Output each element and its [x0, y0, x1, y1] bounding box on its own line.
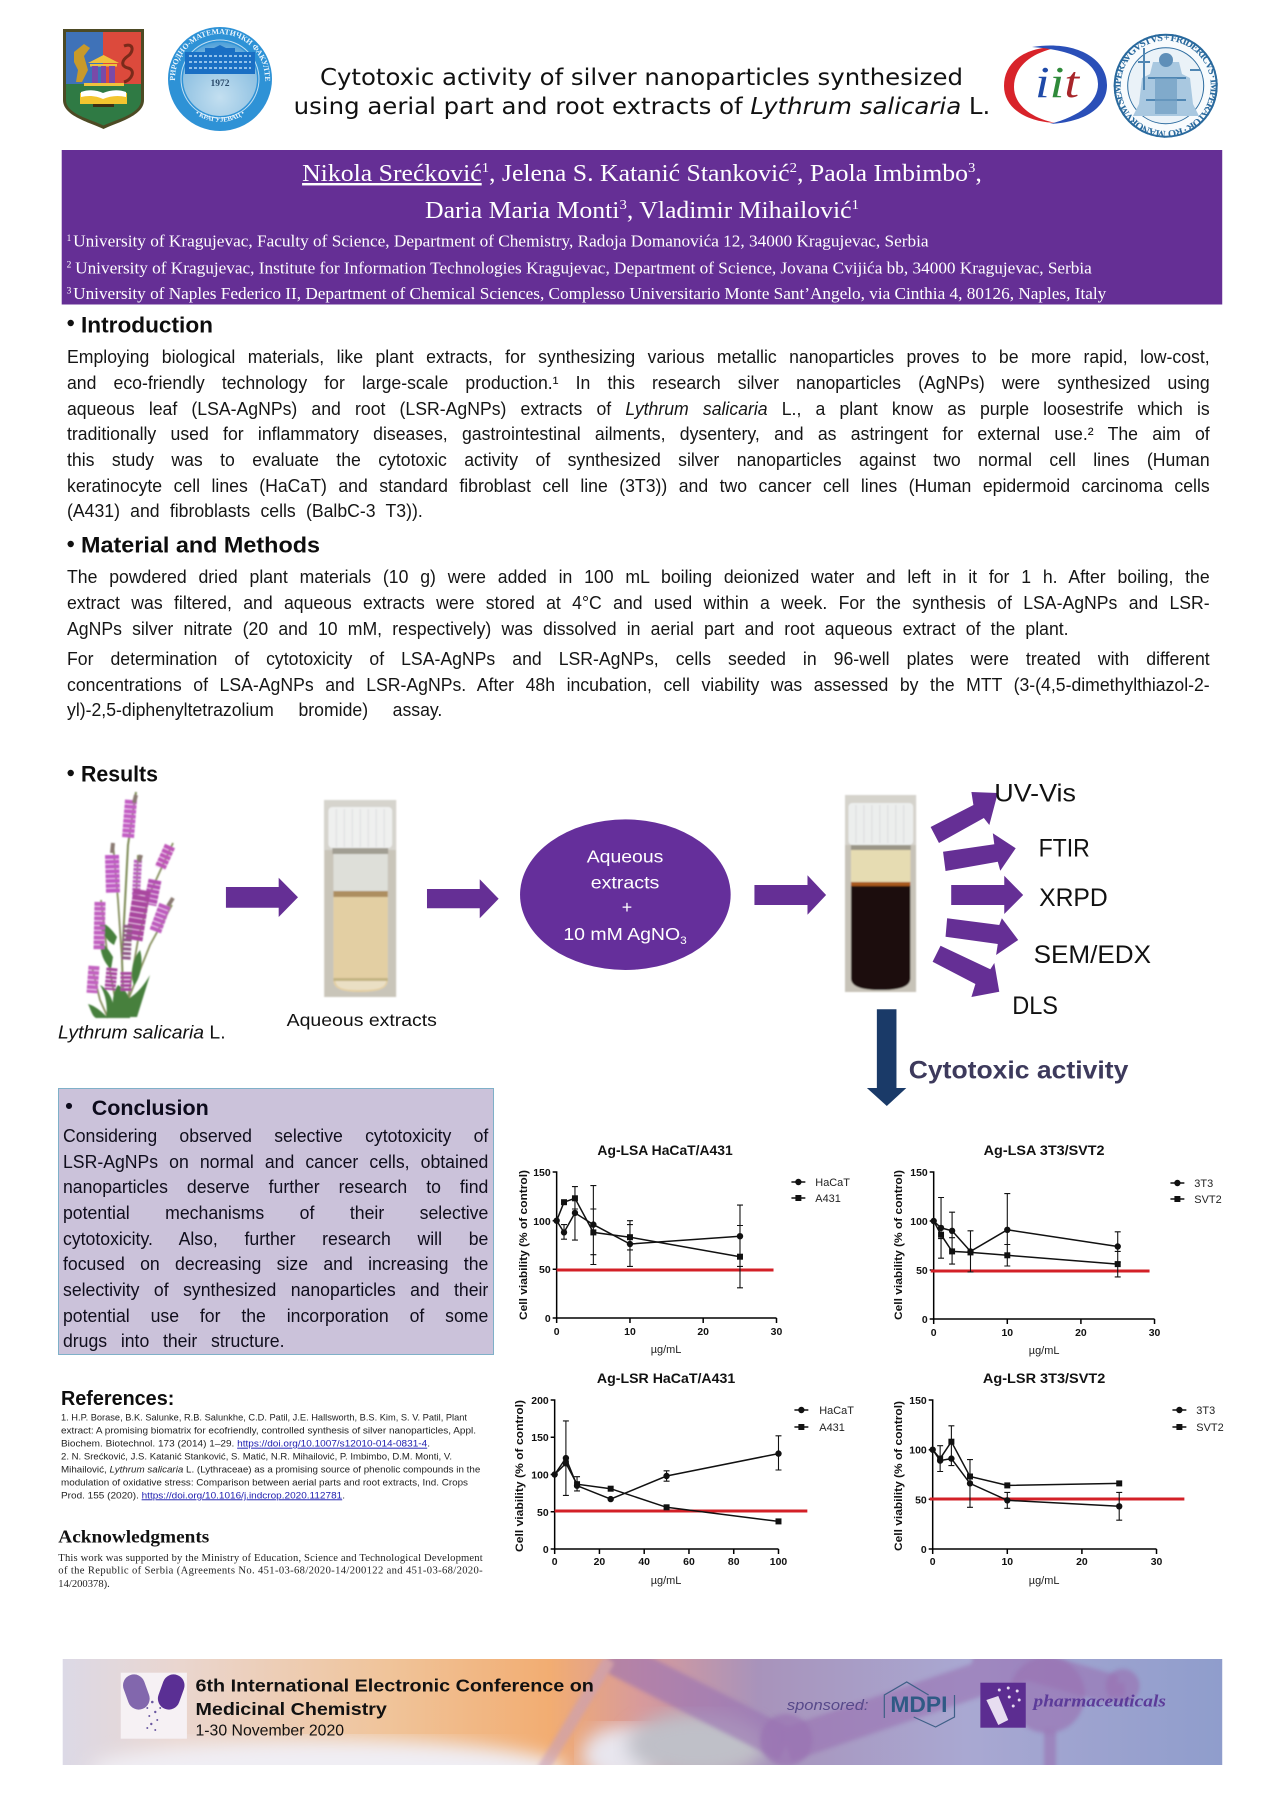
callout: Aqueous extracts + 10 mM AgNO3: 10 mM AgNO [563, 924, 671, 944]
chart: Ag-LSA HaCaT/A431: 150 [533, 1168, 551, 1179]
logo: Faculty of Science round seal [168, 27, 272, 131]
text block: conclusion body: selectivity of synthesized nanoparticles and their [63, 1280, 489, 1300]
chart: Ag-LSA 3T3/SVT2: 0 [922, 1315, 928, 1326]
text block: introduction: keratinocyte cell lines (HaCaT) and standard fibroblast cell line (3T3)) and two cancer cell lines (Human epidermoid carcinoma cells [67, 476, 1210, 496]
chart: Ag-LSR HaCaT/A431: 100 [531, 1470, 549, 1482]
title: Cytotoxic activity of silver nanoparticles synthesized [320, 63, 963, 91]
chart: Ag-LSA 3T3/SVT2: 3T3 [1194, 1178, 1213, 1190]
logo: Faculty of Science round seal: 1972 [210, 79, 230, 89]
text block: methods cytotoxicity: For determination of cytotoxicity of LSA-AgNPs and LSR-AgNPs, cells seeded in 96-well plates were treated with different [67, 649, 1210, 669]
text block: conclusion body: nanoparticles deserve further research to find [63, 1177, 489, 1197]
chart: Ag-LSR 3T3/SVT2: 0 [921, 1545, 927, 1556]
text block: references list: 2. N. Srećković, J.S. Katanić Stanković, S. Matić, N.R. Mihailović, P. Imbimbo, D.M. Monti, V. [61, 1452, 452, 1463]
text: conference name: 6th International Electronic Conference on [195, 1676, 594, 1696]
affiliations: University of Kragujevac, Faculty of Science, Department of Chemistry, Radoja Domanovića 12, 34000 Kragujevac, Serbia [73, 232, 929, 251]
chart: Ag-LSA HaCaT/A431: µg/mL [651, 1344, 681, 1356]
affiliations: University of Naples Federico II, Department of Chemical Sciences, Complesso Universitario Monte Sant’Angelo, via Cinthia 4, 80126, Naples, Italy [73, 284, 1107, 303]
text block: conclusion body: cytotoxicity. Also, further research will be [63, 1229, 489, 1249]
arrow: plant to extract [226, 878, 298, 917]
text block: introduction: aqueous leaf (LSA-AgNPs) and root (LSR-AgNPs) extracts of Lythrum salicaria L., a plant know as purple loosestrife which is [67, 399, 1210, 419]
image: silver nanoparticle vial [845, 795, 916, 992]
chart: Ag-LSA 3T3/SVT2: Ag-LSA 3T3/SVT2 [984, 1142, 1105, 1158]
logo: iit [1004, 45, 1107, 124]
chart: Ag-LSR 3T3/SVT2 [893, 1370, 1224, 1587]
text block: methods extraction: AgNPs silver nitrate (20 and 10 mM, respectively) was dissolved in aerial part and root aqueous extract of the plant. [67, 619, 1069, 639]
author names: 1 [482, 161, 489, 176]
callout: Aqueous extracts + 10 mM AgNO3: 3 [680, 935, 687, 947]
chart: Ag-LSA 3T3/SVT2: 30 [1149, 1328, 1161, 1339]
chart: Ag-LSR HaCaT/A431: HaCaT [819, 1405, 854, 1417]
chart: Ag-LSR HaCaT/A431: 60 [683, 1557, 695, 1568]
chart: Ag-LSR HaCaT/A431: 0 [543, 1545, 549, 1556]
text block: methods cytotoxicity: yl)-2,5-diphenyltetrazolium bromide) assay. [67, 700, 442, 720]
chart: Ag-LSR 3T3/SVT2: 10 [1001, 1557, 1013, 1568]
chart: Ag-LSR HaCaT/A431: Cell viability (% of control) [514, 1400, 526, 1552]
chart: Ag-LSR HaCaT/A431: 80 [728, 1557, 740, 1568]
text block: references list: Mihailović, Lythrum salicaria L. (Lythraceae) as a promising source of phenolic compounds in the [61, 1465, 480, 1476]
text block: acknowledgments: of the Republic of Serbia (Agreements No. 451-03-68/2020-14/200122 and 451-03-68/2020- [58, 1566, 483, 1577]
label: SEM/EDX: SEM/EDX [1034, 941, 1151, 969]
text block: references list: Biochem. Biotechnol. 173 (2014) 1–29. https://doi.org/10.1007/s12010-014-0831-4 . [61, 1439, 430, 1450]
author names: , Jelena S. Katanić Stanković [489, 160, 790, 187]
chart: Ag-LSR 3T3/SVT2: 150 [909, 1396, 927, 1407]
text: conference name: Medicinal Chemistry [195, 1699, 387, 1719]
chart: Ag-LSR 3T3/SVT2: 50 [915, 1495, 927, 1506]
chart: Ag-LSR 3T3/SVT2: 0 [930, 1557, 936, 1568]
logo: Faculty of Science round seal: • КРАГУЈЕВАЦ • [196, 112, 244, 122]
arrow: FTIR [943, 833, 1016, 871]
text block: acknowledgments: This work was supported by the Ministry of Education, Science and Technological Development [58, 1553, 483, 1564]
author names [302, 160, 982, 224]
chart: Ag-LSR HaCaT/A431: Ag-LSR HaCaT/A431 [597, 1370, 735, 1386]
affiliations: 2 [67, 260, 72, 271]
icon: pharmaceuticals logo: pharmaceuticals [1031, 1692, 1166, 1711]
chart: Ag-LSA HaCaT/A431: 0 [554, 1327, 560, 1338]
chart: Ag-LSA HaCaT/A431: Cell viability (% of control) [518, 1170, 530, 1320]
author names: , Paola Imbimbo [797, 160, 968, 187]
icon: MDPI logo: MDPI [890, 1692, 948, 1717]
icon: Lythrum salicaria plant [88, 792, 173, 1018]
chart: Ag-LSR HaCaT/A431: 50 [537, 1508, 549, 1519]
text block: introduction: (A431) and fibroblasts cells (BalbC-3 T3)). [67, 501, 423, 521]
text block: methods extraction [67, 567, 1210, 639]
text block: references list [61, 1413, 480, 1501]
text block: methods extraction: extract was filtered, and aqueous extracts were stored at 4°C and used within a week. For the synthesis of LSA-AgNPs and LSR- [67, 593, 1210, 613]
panel: results flow diagram [226, 780, 1151, 1106]
panel: conference banner [62, 1659, 1222, 1765]
chart: Ag-LSR 3T3/SVT2: µg/mL [1029, 1575, 1059, 1587]
author names: , Vladimir Mihailović [627, 197, 852, 224]
chart: Ag-LSA HaCaT/A431: 100 [533, 1217, 551, 1228]
text block: references list: Prod. 155 (2020). https://doi.org/10.1016/j.indcrop.2020.112781 . [61, 1490, 345, 1501]
chart: Ag-LSA 3T3/SVT2: Cell viability (% of control) [893, 1170, 905, 1320]
text block: acknowledgments [58, 1553, 483, 1590]
author names: 3 [968, 161, 975, 176]
arrow: SEM/EDX [946, 918, 1018, 955]
title [294, 63, 990, 120]
text: conference name [195, 1676, 594, 1740]
chart: Ag-LSR HaCaT/A431: 0 [552, 1557, 558, 1568]
chart: Ag-LSR 3T3/SVT2: 100 [909, 1446, 927, 1457]
text block: introduction: traditionally used for inflammatory diseases, gastrointestinal ailments, dysentery, and as astringent for external use.² The aim of [67, 424, 1210, 444]
logo: iit: iit [1035, 58, 1081, 107]
heading: Introduction: Introduction [81, 312, 213, 337]
arrow: XRPD [951, 876, 1023, 914]
text block: methods cytotoxicity: concentrations of LSA-AgNPs and LSR-AgNPs. After 48h incubation, cell viability was assessed by the MTT (3-(4,5-dimethylthiazol-2- [67, 675, 1210, 695]
text block: introduction [67, 347, 1210, 521]
arrow: reaction to nanoparticles [754, 875, 826, 915]
text block: methods cytotoxicity [67, 649, 1210, 720]
text block: conclusion body: focused on decreasing size and increasing the [63, 1254, 489, 1274]
chart: Ag-LSR 3T3/SVT2: SVT2 [1196, 1422, 1224, 1434]
chart: Ag-LSR 3T3/SVT2: Cell viability (% of control) [893, 1401, 905, 1551]
affiliations: 1 [67, 234, 72, 244]
author names: 2 [790, 161, 797, 176]
chart: Ag-LSA HaCaT/A431: 50 [539, 1265, 551, 1276]
chart: Ag-LSR 3T3/SVT2: 3T3 [1196, 1405, 1215, 1417]
label: Aqueous extracts: Aqueous extracts [287, 1010, 437, 1030]
callout: Aqueous extracts + 10 mM AgNO3: Aqueous [587, 847, 663, 867]
chart: Ag-LSA 3T3/SVT2: 0 [931, 1328, 937, 1339]
chart: Ag-LSA HaCaT/A431: HaCaT [815, 1177, 850, 1189]
text block: conclusion body: potential mechanisms of their selective [63, 1203, 489, 1223]
chart: Ag-LSA 3T3/SVT2: 50 [916, 1266, 928, 1277]
chart: Ag-LSA 3T3/SVT2: 100 [910, 1217, 928, 1228]
icon: MDPI logo [884, 1682, 954, 1727]
label: XRPD: XRPD [1039, 884, 1108, 912]
affiliations: 3 [67, 286, 72, 297]
chart: Ag-LSR HaCaT/A431: 200 [531, 1396, 549, 1407]
text: conference name: 1-30 November 2020 [195, 1723, 344, 1740]
title: using aerial part and root extracts of Lythrum salicaria L. [294, 92, 990, 120]
text block: acknowledgments: 14/200378). [58, 1579, 110, 1590]
heading: Conclusion: Conclusion [92, 1096, 209, 1120]
logo: University of Naples seal: MANORVM SEMPER AVGVSTVS + FRIDERICVS · IMPERATOR · RO [1114, 34, 1218, 138]
chart: Ag-LSR HaCaT/A431: 100 [770, 1557, 787, 1568]
text block: references list: modulation of oxidative stress: Comparison between aerial parts and root extracts, Ind. Crops [61, 1477, 468, 1488]
chart: Ag-LSR HaCaT/A431 [514, 1370, 854, 1587]
arrow: extract to reaction [427, 879, 499, 918]
chart: Ag-LSR HaCaT/A431: 150 [531, 1433, 549, 1444]
author names: 3 [619, 198, 627, 213]
label: UV-Vis: UV-Vis [994, 780, 1076, 808]
chart: Ag-LSA 3T3/SVT2: µg/mL [1029, 1345, 1059, 1357]
panel: authors band [62, 150, 1222, 304]
text block: conclusion body: LSR-AgNPs on normal and cancer cells, obtained [63, 1152, 489, 1172]
heading: Conclusion: • [65, 1094, 73, 1118]
author names: Daria Maria Monti [425, 197, 609, 224]
chart: Ag-LSR HaCaT/A431: 20 [594, 1557, 605, 1568]
heading: Results: Results [81, 762, 158, 787]
text block: methods extraction: The powdered dried plant materials (10 g) were added in 100 mL boiling deionized water and left in it for 1 h. After boiling, the [67, 567, 1210, 587]
text block: introduction: and eco-friendly technology for large-scale production.¹ In this research silver nanoparticles (AgNPs) were synthesized using [67, 373, 1210, 393]
affiliations [67, 232, 1107, 303]
arrow: UV-Vis [931, 792, 998, 843]
author names: 1 [852, 198, 859, 213]
text block: conclusion body: Considering observed selective cytotoxicity of [63, 1126, 489, 1146]
label: Lythrum salicaria L.: Lythrum salicaria L. [58, 1022, 226, 1042]
text block: conclusion body: drugs into their structure. [63, 1331, 285, 1351]
text: sponsored: sponsored: [787, 1697, 868, 1714]
author names: , [975, 160, 982, 187]
chart: Ag-LSA HaCaT/A431: 20 [697, 1327, 709, 1338]
chart: Ag-LSA 3T3/SVT2 [893, 1142, 1222, 1357]
chart: Ag-LSA HaCaT/A431: 0 [545, 1314, 551, 1325]
author names: Nikola Srećković [302, 160, 482, 187]
chart: Ag-LSA HaCaT/A431 [518, 1142, 850, 1356]
arrow: DLS [933, 946, 999, 997]
icon: pharmaceuticals logo [980, 1683, 1166, 1728]
label: FTIR: FTIR [1039, 835, 1090, 863]
callout: Aqueous extracts + 10 mM AgNO3: extracts [591, 872, 659, 892]
chart: Ag-LSA HaCaT/A431: Ag-LSA HaCaT/A431 [597, 1142, 733, 1158]
chart: Ag-LSR 3T3/SVT2: 20 [1076, 1557, 1088, 1568]
heading: Acknowledgments: Acknowledgments [58, 1526, 209, 1546]
chart: Ag-LSA 3T3/SVT2: 150 [910, 1168, 928, 1179]
chart: Ag-LSA 3T3/SVT2: SVT2 [1194, 1194, 1222, 1206]
icon: capsule logo [120, 1671, 188, 1739]
logo: University of Kragujevac shield [63, 29, 144, 129]
heading: Material and Methods: Material and Methods [81, 533, 320, 558]
label: Cytotoxic activity: Cytotoxic activity [909, 1056, 1128, 1085]
chart: Ag-LSR 3T3/SVT2: 30 [1151, 1557, 1162, 1568]
chart: Ag-LSR HaCaT/A431: µg/mL [651, 1575, 681, 1587]
image: aqueous extract vial [324, 800, 396, 997]
heading: References: References: [61, 1388, 174, 1410]
text block: introduction: Employing biological materials, like plant extracts, for synthesizing various metallic nanoparticles proves to be more rapid, low-cost, [67, 347, 1210, 367]
chart: Ag-LSR HaCaT/A431: 40 [638, 1557, 650, 1568]
callout: Aqueous extracts + 10 mM AgNO3: + [622, 897, 632, 917]
label: DLS: DLS [1012, 992, 1058, 1020]
callout: Aqueous extracts + 10 mM AgNO3 [520, 819, 731, 970]
text block: conclusion body [63, 1126, 489, 1351]
chart: Ag-LSA HaCaT/A431: 30 [771, 1327, 782, 1338]
text block: introduction: this study was to evaluate the cytotoxic activity of synthesized silver nanoparticles against two normal cell lines (Human [67, 450, 1210, 470]
chart: Ag-LSA 3T3/SVT2: 10 [1001, 1328, 1013, 1339]
text block: references list: 1. H.P. Borase, B.K. Salunke, R.B. Salunkhe, C.D. Patil, J.E. Hallsworth, B.S. Kim, S. V. Patil, Plant [61, 1413, 467, 1424]
text block: conclusion body: potential use for the incorporation of some [63, 1306, 489, 1326]
affiliations: University of Kragujevac, Institute for Information Technologies Kragujevac, Department of Science, Jovana Cvijića bb, 34000 Kragujevac, Serbia [75, 258, 1093, 277]
panel: conclusion [58, 1088, 494, 1355]
arrow: to cytotoxic activity [867, 1009, 906, 1106]
chart: Ag-LSR HaCaT/A431: A431 [819, 1422, 845, 1434]
chart: Ag-LSA HaCaT/A431: A431 [815, 1193, 841, 1205]
chart: Ag-LSA HaCaT/A431: 10 [624, 1327, 636, 1338]
chart: Ag-LSR 3T3/SVT2: Ag-LSR 3T3/SVT2 [983, 1370, 1106, 1386]
text block: references list: extract: A promising biomatrix for ecofriendly, controlled synthesis of silver nanoparticles, Appl. [61, 1426, 476, 1437]
chart: Ag-LSA 3T3/SVT2: 20 [1075, 1328, 1087, 1339]
